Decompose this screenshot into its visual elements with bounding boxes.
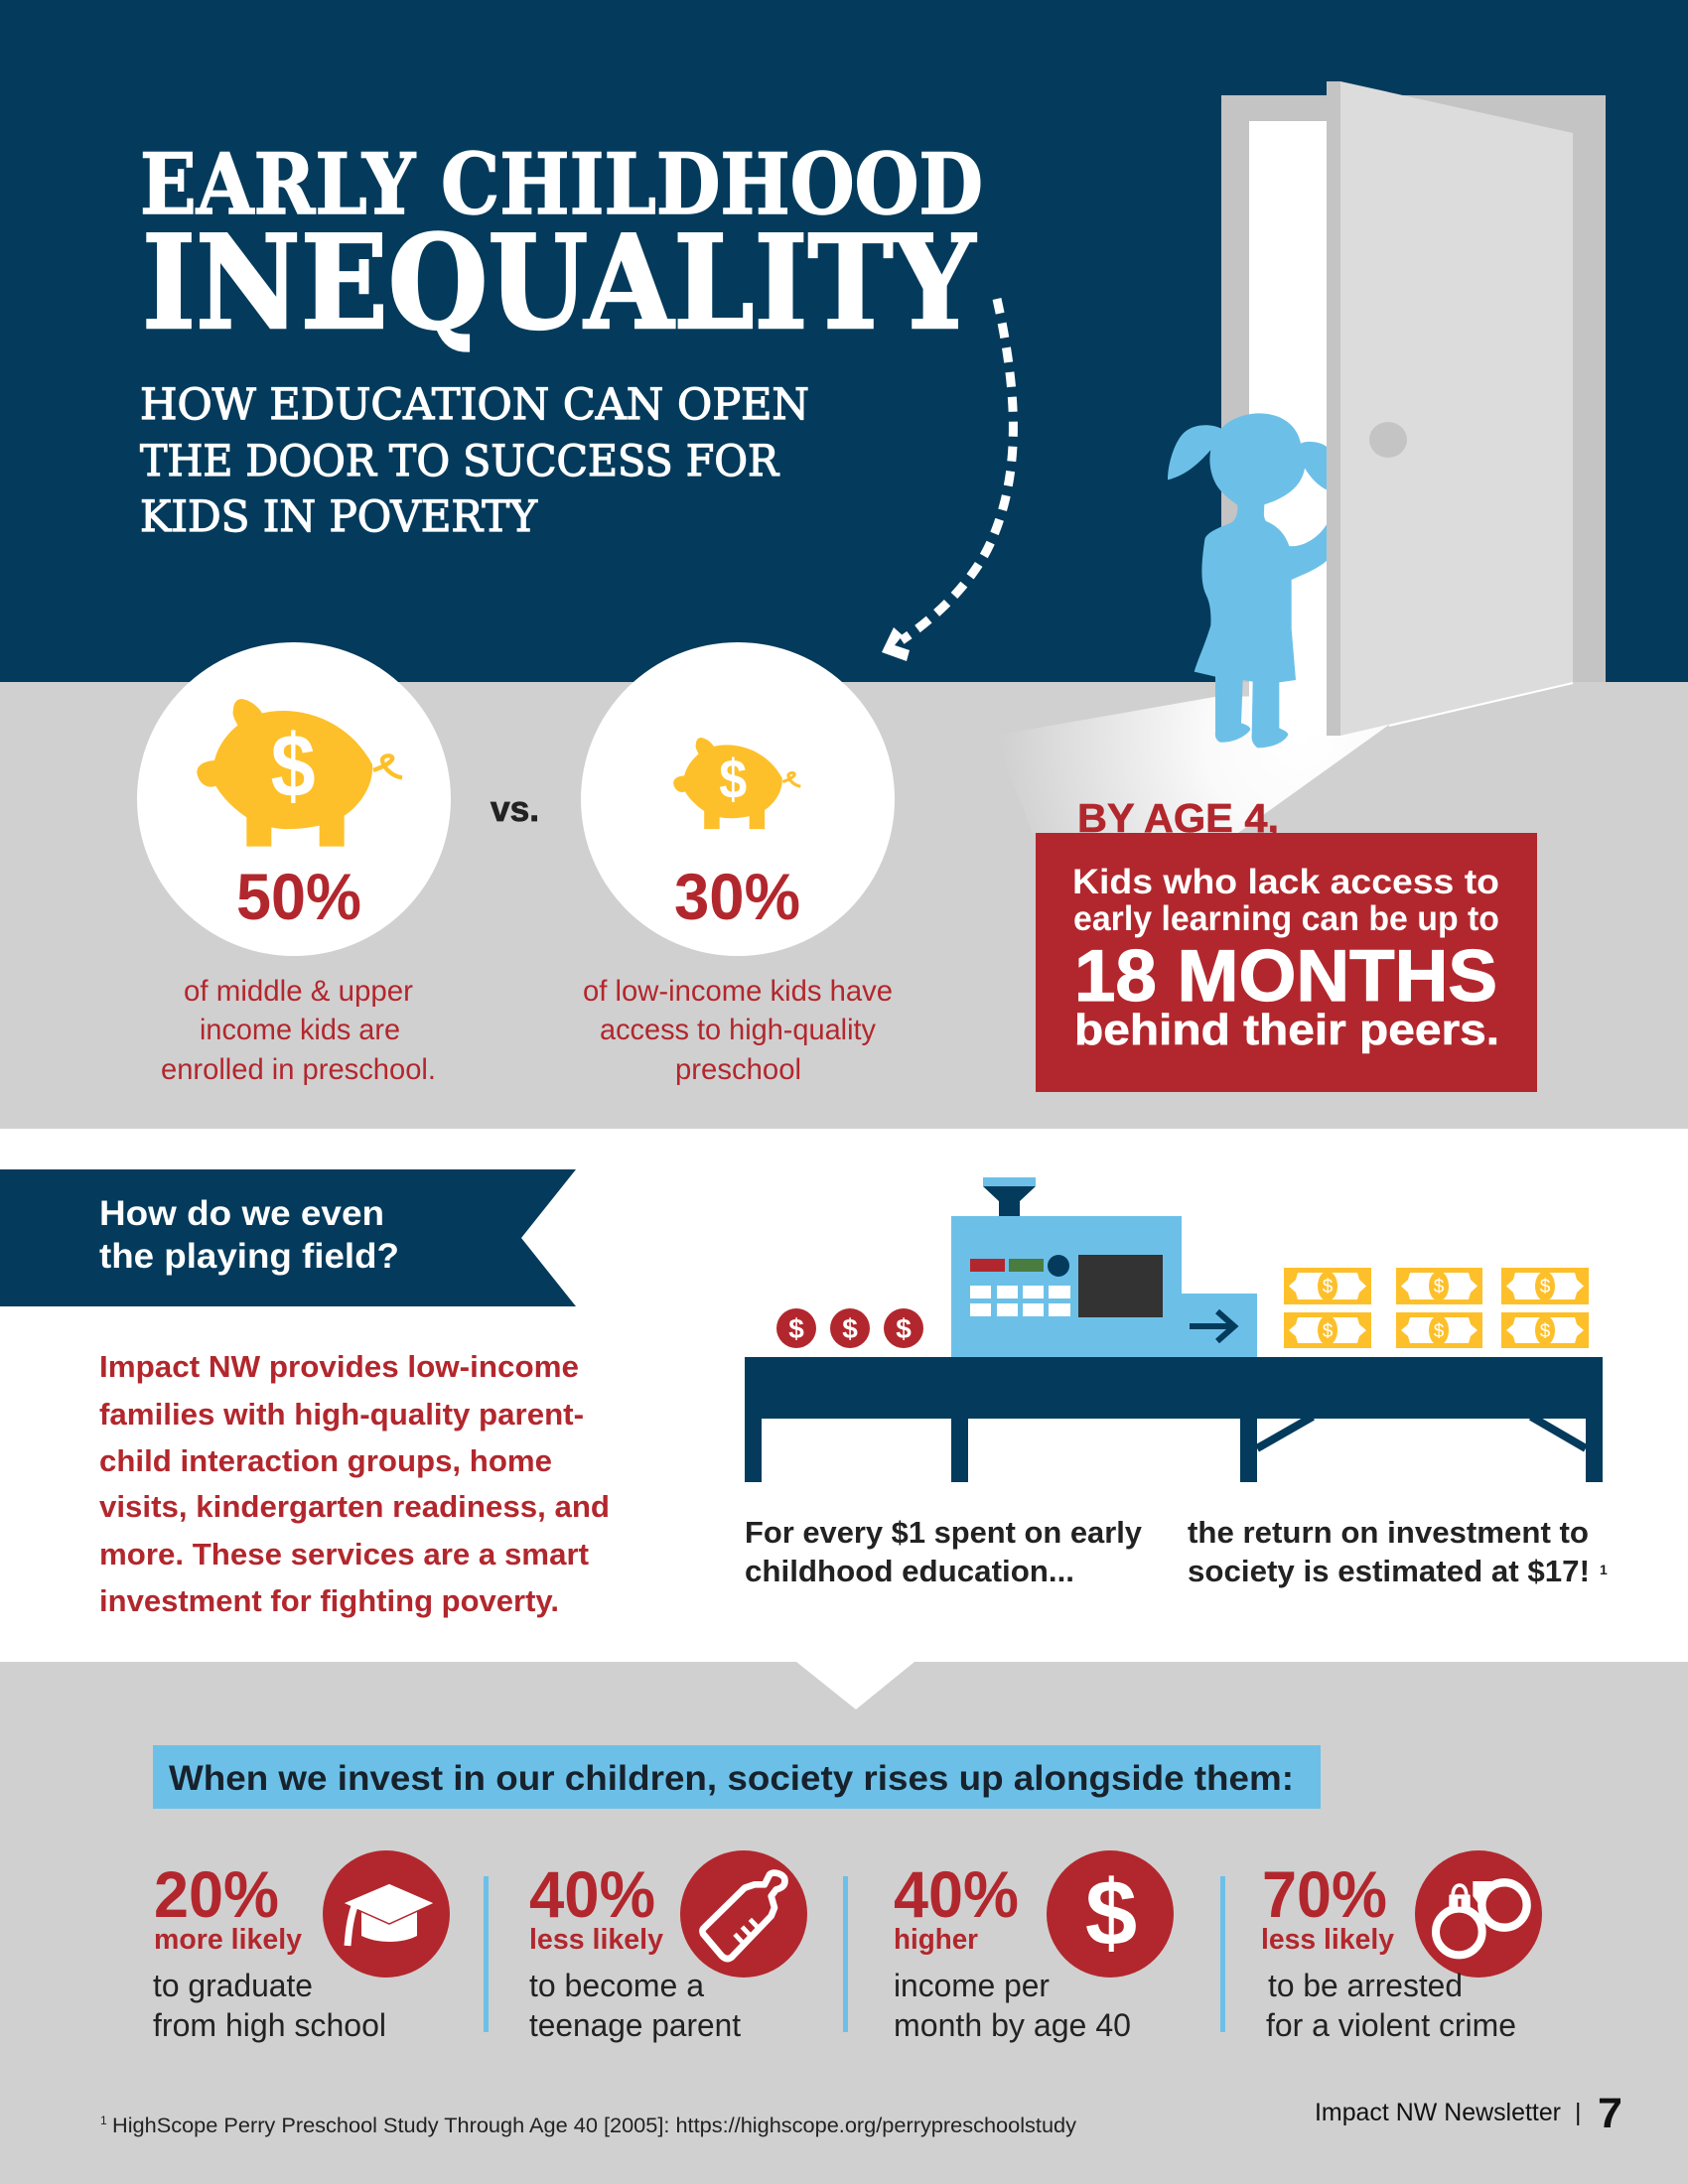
panel: 30% stat circle: [581, 642, 895, 956]
text: 50% caption: of middle & upper: [184, 975, 413, 1008]
divider: [843, 1876, 848, 2032]
callout: 18 months behind: early learning can be up to: [1073, 899, 1499, 938]
text block: Impact NW services: child interaction groups, home: [99, 1443, 552, 1478]
text: 50% caption: income kids are: [200, 1014, 400, 1046]
text: 30% caption: [583, 975, 893, 1086]
text block: Impact NW services: [99, 1349, 610, 1618]
stat: 70% less likely arrested: [1261, 1850, 1542, 2043]
stat: 20% more likely to graduate: 20%: [154, 1857, 279, 1931]
subtitle: HOW EDUCATION CAN OPEN: [140, 380, 809, 430]
heading bar: when we invest: [153, 1745, 1321, 1809]
icon: small piggy bank: $: [719, 748, 747, 810]
text block: Impact NW services: families with high-quality parent-: [99, 1397, 584, 1432]
icons: three coins: $: [896, 1313, 912, 1344]
stat: 40% higher income: income per: [894, 1968, 1050, 2003]
icons: six dollar bills: $: [1540, 1277, 1551, 1297]
divider: [1220, 1876, 1225, 2032]
panel: 50% stat circle: 50%: [236, 860, 361, 933]
icon: baby bottle: [680, 1850, 807, 1978]
subtitle: THE DOOR TO SUCCESS FOR: [140, 437, 780, 486]
heading bar: when we invest: When we invest in our children, society rises up alongside them:: [169, 1759, 1294, 1798]
text block: Impact NW services: more. These services are a smart: [99, 1537, 589, 1571]
icon: small piggy bank: [673, 738, 800, 829]
illustration: girl silhouette: [1168, 413, 1327, 748]
arrow: dashed curve to circles: [882, 299, 1013, 661]
stat: 70% less likely arrested: 70%: [1262, 1857, 1387, 1931]
text: return on investment: the return on investment to: [1188, 1515, 1589, 1550]
page footer: newsletter name and page number: Impact NW Newsletter: [1315, 2099, 1561, 2126]
subtitle: KIDS IN POVERTY: [140, 492, 538, 542]
text: for every $1 spent: [745, 1515, 1143, 1588]
page footer: newsletter name and page number: |: [1575, 2099, 1581, 2126]
text: 50% caption: enrolled in preschool.: [161, 1053, 436, 1086]
stat: 40% higher income: month by age 40: [894, 2007, 1131, 2043]
icon: large piggy bank: $: [271, 717, 316, 816]
stat: 20% more likely to graduate: to graduate: [153, 1968, 313, 2003]
banner: how do we even the playing field: the playing field?: [99, 1237, 399, 1276]
footnote: 1: [100, 2114, 107, 2127]
stat: 40% less likely teenage parent: to become a: [529, 1968, 704, 2003]
stat: 40% less likely teenage parent: 40%: [529, 1857, 655, 1931]
page footer: newsletter name and page number: 7: [1598, 2090, 1622, 2137]
footnote: HighScope Perry Preschool Study Through Age 40 [2005]: https://highscope.org/perrypreschoolstudy: [112, 2115, 1077, 2137]
subtitle: [140, 380, 809, 542]
page footer: newsletter name and page number: [1315, 2090, 1622, 2137]
text: return on investment: society is estimated at $17!: [1188, 1554, 1590, 1588]
illustration: conveyor machine turning coins into bills: [745, 1177, 1603, 1482]
illustration: open door: [1221, 81, 1606, 736]
text: vs.: vs.: [491, 788, 539, 829]
icons: three coins: $: [788, 1313, 804, 1344]
text block: Impact NW services: Impact NW provides low-income: [99, 1349, 579, 1384]
stat: 40% higher income: [894, 1850, 1174, 2043]
banner: how do we even the playing field: [0, 1169, 576, 1306]
light on floor from the door: [993, 682, 1573, 833]
text: return on investment: [1188, 1515, 1608, 1588]
icons: six dollar bills: $: [1323, 1321, 1334, 1342]
title: INEQUALITY: [142, 206, 977, 358]
icon: dollar sign: $: [1085, 1860, 1137, 1965]
stat: 40% less likely teenage parent: less likely: [529, 1924, 663, 1956]
callout: 18 months behind: [1036, 833, 1537, 1092]
title: EARLY CHILDHOOD: [140, 135, 983, 233]
text: for every $1 spent: childhood education...: [745, 1554, 1074, 1588]
text: 50% caption: [161, 975, 436, 1086]
panel: navy header background: [0, 0, 1688, 682]
icon: handcuffs: [1415, 1850, 1542, 1978]
callout heading: by age 4: BY AGE 4,: [1077, 795, 1279, 841]
text block: Impact NW services: visits, kindergarten readiness, and: [99, 1489, 610, 1524]
title: [140, 135, 983, 358]
stat: 40% less likely teenage parent: teenage parent: [529, 2007, 741, 2043]
text: 30% caption: preschool: [675, 1053, 801, 1086]
banner: how do we even the playing field: How do we even: [99, 1194, 384, 1233]
icons: six dollar bills: $: [1434, 1277, 1445, 1297]
text block: Impact NW services: investment for fighting poverty.: [99, 1583, 559, 1618]
callout: 18 months behind: Kids who lack access to: [1072, 863, 1499, 901]
panel: white middle section: [0, 1129, 1688, 1662]
callout: 18 months behind: 18 MONTHS: [1074, 936, 1497, 1017]
icons: six dollar bills: $: [1540, 1321, 1551, 1342]
stat: 20% more likely to graduate: from high school: [153, 2007, 386, 2043]
icons: six dollar bills: $: [1434, 1321, 1445, 1342]
stat: 20% more likely to graduate: more likely: [154, 1924, 302, 1956]
icons: three coins: $: [842, 1313, 858, 1344]
icons: three coins: [776, 1308, 923, 1348]
icons: six dollar bills: $: [1323, 1277, 1334, 1297]
machine body: [951, 1177, 1257, 1357]
conveyor table: [745, 1357, 1603, 1482]
text: for every $1 spent: For every $1 spent on early: [745, 1515, 1143, 1550]
divider: [484, 1876, 489, 2032]
stat: 20% more likely to graduate: [153, 1850, 450, 2043]
stat: 70% less likely arrested: to be arrested: [1268, 1968, 1463, 2003]
stat: 40% less likely teenage parent: [529, 1850, 807, 2043]
stat: 70% less likely arrested: for a violent crime: [1266, 2007, 1516, 2043]
icon: large piggy bank: [197, 699, 402, 847]
icon: graduation cap: [323, 1850, 450, 1978]
icon: dollar sign: [1047, 1850, 1174, 1978]
stat: 40% higher income: 40%: [894, 1857, 1019, 1931]
text: 30% caption: access to high-quality: [600, 1014, 876, 1046]
icons: six dollar bills: [1284, 1268, 1589, 1348]
text: 30% caption: of low-income kids have: [583, 975, 893, 1008]
panel: 30% stat circle: 30%: [674, 860, 800, 933]
callout: 18 months behind: behind their peers.: [1074, 1006, 1499, 1054]
panel: 50% stat circle: [137, 642, 451, 956]
stat: 70% less likely arrested: less likely: [1261, 1924, 1394, 1956]
stat: 40% higher income: higher: [894, 1924, 978, 1956]
text: return on investment: 1: [1600, 1562, 1608, 1577]
pointer triangle: [796, 1662, 914, 1709]
